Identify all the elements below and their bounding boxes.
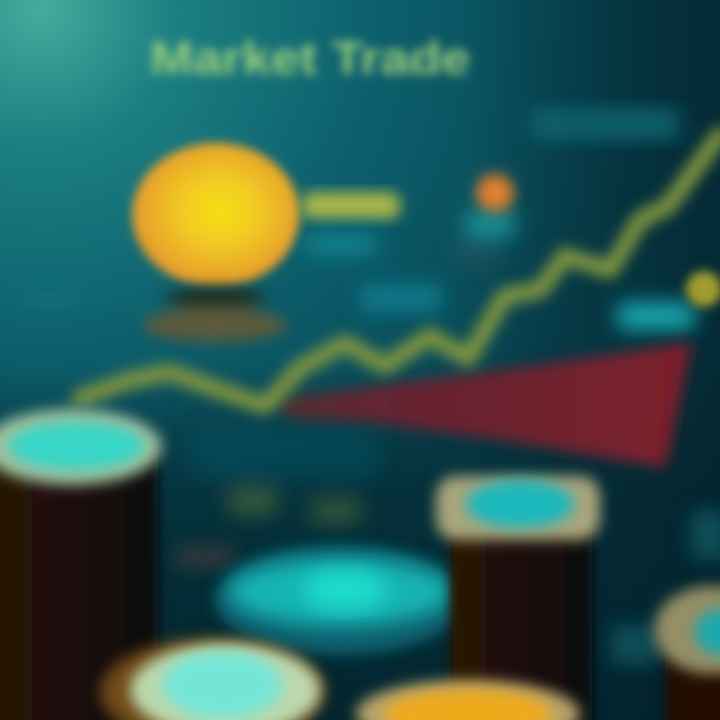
icon: gold coin bottom [356, 680, 580, 720]
cylinder: bottom left [100, 638, 324, 720]
cyan disc [215, 545, 465, 655]
cylinder: left [0, 409, 162, 720]
coin label [302, 192, 400, 219]
line chart [80, 135, 720, 406]
icon: small orange marker [476, 174, 514, 212]
line end marker [686, 271, 720, 307]
cylinder: right [654, 586, 720, 720]
title: Market Trade [150, 32, 470, 84]
red area chart [280, 342, 692, 468]
cylinder: middle [436, 476, 600, 720]
lower faint labels [175, 430, 720, 665]
small labels [20, 210, 695, 330]
icon: gold coin [132, 143, 300, 287]
coin base [143, 287, 287, 342]
faint top-right heading [530, 108, 680, 140]
